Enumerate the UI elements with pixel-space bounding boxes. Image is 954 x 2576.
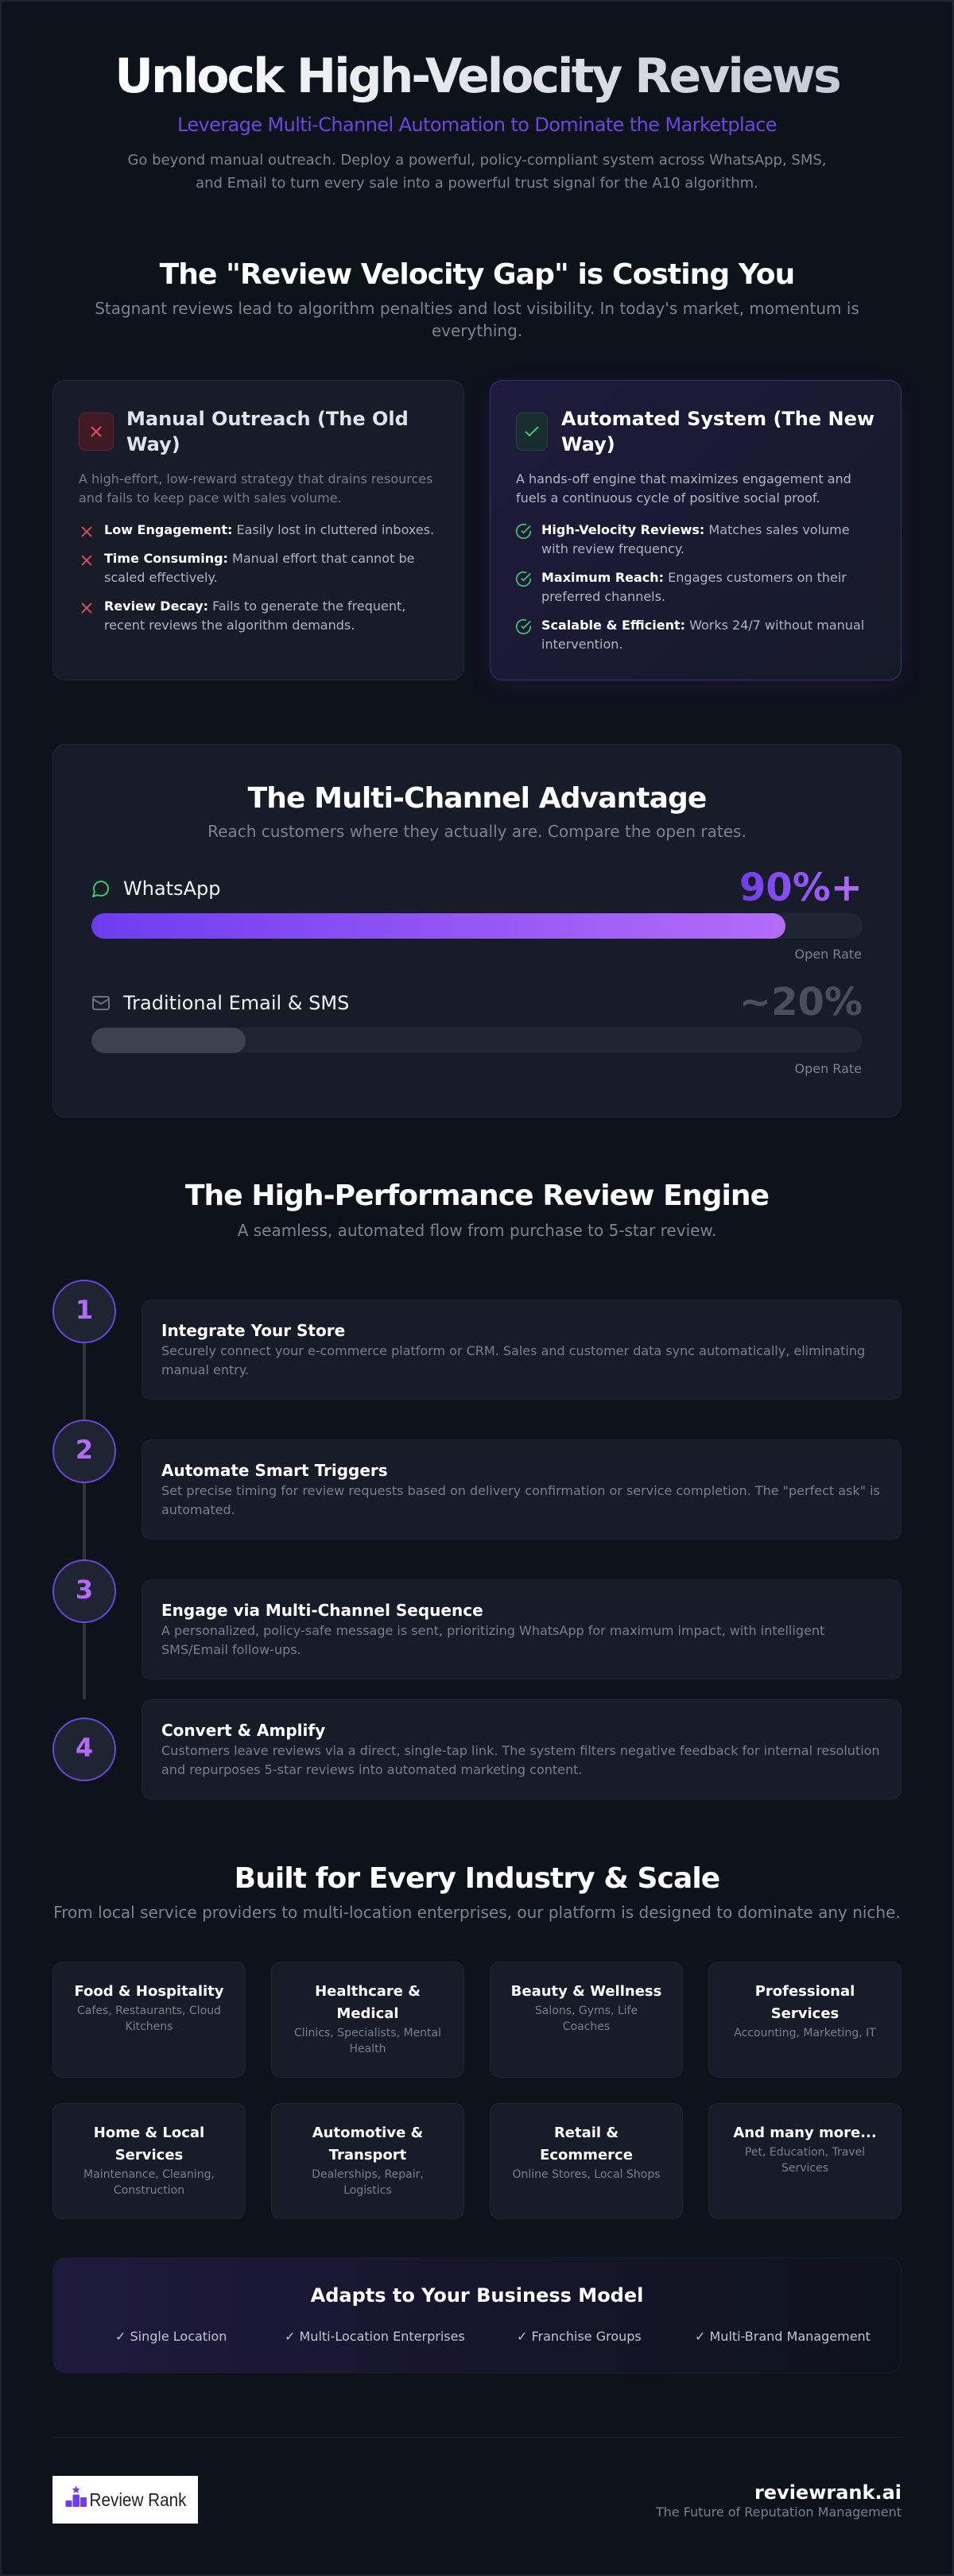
step 3 text: A personalized, policy-safe message is sent, prioritizing WhatsApp for maximum impact, with intelligent <box>161 1623 824 1638</box>
industry card: food and hospitality: Kitchens <box>126 2020 173 2033</box>
list item: review decay: recent reviews the algorithm demands. <box>104 618 355 633</box>
list item: maximum reach: preferred channels. <box>541 589 665 604</box>
section subtitle: review engine: A seamless, automated flow from purchase to 5-star review. <box>238 1221 716 1240</box>
list item: scalable <box>541 618 864 652</box>
industry card: professional services <box>708 1962 902 2078</box>
industry card: retail and ecommerce: Ecommerce <box>540 2147 633 2163</box>
icon: x time consuming <box>81 555 92 566</box>
card title: manual outreach: Way) <box>126 433 180 455</box>
list item: time consuming: scaled effectively. <box>104 570 218 585</box>
step 4 text <box>161 1743 880 1777</box>
step 3 card <box>142 1579 902 1679</box>
model: multi-location: ✓ Multi-Location Enterprises <box>285 2329 465 2344</box>
step 4 card <box>142 1699 902 1799</box>
label: whatsapp: WhatsApp <box>123 877 220 900</box>
heading: review engine: The High-Performance Review Engine <box>185 1180 769 1212</box>
industry card: beauty and wellness: Coaches <box>563 2020 610 2033</box>
card title: automated system: Automated System (The New <box>561 408 874 430</box>
industry card: many more: And many more... <box>733 2125 877 2141</box>
subtitle: Leverage Multi-Channel Automation to Dominate the Marketplace <box>177 114 777 136</box>
industry card: beauty and wellness <box>490 1962 683 2078</box>
panel: automated system <box>490 380 902 680</box>
panel: business model <box>52 2257 902 2373</box>
bar: whatsapp open rate <box>91 913 863 939</box>
list item: time consuming: Time Consuming: Manual effort that cannot be <box>104 551 414 566</box>
step 3 number: 3 <box>76 1575 93 1605</box>
step 2 number: 2 <box>76 1435 93 1465</box>
industry card: many more: Pet, Education, Travel <box>745 2146 865 2159</box>
model: franchise groups: ✓ Franchise Groups <box>517 2329 642 2344</box>
list item: high velocity: High-Velocity Reviews: Matches sales volume <box>541 522 850 537</box>
step 1 text: Securely connect your e-commerce platform or CRM. Sales and customer data sync automatically, eliminating <box>161 1343 865 1358</box>
step 2 text <box>161 1483 880 1517</box>
step 4 text: and repurposes 5-star reviews into automated marketing content. <box>161 1762 582 1777</box>
industry card: professional services: Accounting, Marketing, IT <box>734 2027 876 2039</box>
industry card: healthcare and medical: Medical <box>336 2005 399 2022</box>
list item: high velocity: with review frequency. <box>541 541 684 556</box>
list item: scalable: intervention. <box>541 637 622 652</box>
step 4 number: 4 <box>76 1733 93 1763</box>
section subtitle: industries: From local service providers to multi-location enterprises, our platform is designed to dominate any niche. <box>53 1903 901 1922</box>
card title: manual outreach: Manual Outreach (The Old <box>126 408 409 430</box>
industry card: many more <box>708 2103 902 2219</box>
list item: maximum reach: Maximum Reach: Engages customers on their <box>541 570 847 585</box>
list item: review decay <box>104 598 405 633</box>
card title: automated system: Way) <box>561 433 615 455</box>
panel: manual outreach <box>52 380 464 680</box>
list item: review decay: Review Decay: Fails to generate the frequent, <box>104 598 405 614</box>
industry card: beauty and wellness: Beauty & Wellness <box>511 1983 661 2000</box>
panel: multi-channel advantage <box>52 744 902 1118</box>
industry card: healthcare and medical: Clinics, Specialists, Mental <box>294 2027 441 2039</box>
step 4 number <box>52 1718 116 1781</box>
icon: red x box <box>79 413 114 451</box>
step 2 title: Automate Smart Triggers <box>161 1461 388 1480</box>
card title: manual outreach <box>126 408 409 455</box>
logo bars and star <box>65 2486 87 2507</box>
caption: whatsapp open rate: Open Rate <box>794 947 862 962</box>
card description: automated system: A hands-off engine that maximizes engagement and <box>516 471 851 486</box>
industry card: beauty and wellness: Salons, Gyms, Life <box>535 2005 638 2017</box>
step 2 card <box>142 1439 902 1540</box>
industry card: professional services: Services <box>771 2005 839 2022</box>
card title: automated system <box>561 408 874 455</box>
caption: email and sms open rate: Open Rate <box>794 1061 862 1076</box>
industry card: retail and ecommerce: Online Stores, Local Shops <box>512 2168 661 2181</box>
industry card: automotive and transport: Dealerships, Repair, <box>312 2168 424 2181</box>
industry card: healthcare and medical: Healthcare & <box>315 1983 421 2000</box>
step 2 number <box>52 1420 116 1483</box>
heading: multi-channel advantage: The Multi-Channel Advantage <box>248 782 706 815</box>
footer brand: reviewrank.ai <box>754 2481 902 2504</box>
icon: x review decay <box>81 602 92 614</box>
model: single location: ✓ Single Location <box>115 2329 227 2344</box>
intro text: and Email to turn every sale into a powerful trust signal for the A10 algorithm. <box>196 175 758 191</box>
list item: scalable: Scalable & Efficient: Works 24/7 without manual <box>541 618 864 633</box>
icon: check maximum reach <box>515 571 531 587</box>
step 4 title: Convert & Amplify <box>161 1721 325 1740</box>
industry card: home and local services: Home & Local <box>94 2125 204 2141</box>
icon: whatsapp chat bubble <box>92 881 109 897</box>
model: multi-brand: ✓ Multi-Brand Management <box>695 2329 871 2344</box>
logo: review rank <box>52 2476 198 2524</box>
industry card: automotive and transport <box>271 2103 464 2219</box>
industry card: home and local services: Construction <box>114 2184 184 2197</box>
list item: time consuming <box>104 551 414 585</box>
industry card: food and hospitality: Cafes, Restaurants, Cloud <box>77 2005 221 2017</box>
card description: automated system: fuels a continuous cycle of positive social proof. <box>516 490 820 506</box>
step 4 text: Customers leave reviews via a direct, single-tap link. The system filters negative feedback for internal resolution <box>161 1743 880 1758</box>
step 3 number <box>52 1559 116 1623</box>
list item: maximum reach <box>541 570 847 604</box>
intro text <box>127 152 827 191</box>
footer tagline: The Future of Reputation Management <box>656 2504 902 2520</box>
step 1 number: 1 <box>76 1295 93 1325</box>
industry card: healthcare and medical <box>271 1962 464 2078</box>
industry card: home and local services <box>52 2103 246 2219</box>
industry card: automotive and transport: Transport <box>329 2147 406 2163</box>
industry card: automotive and transport: Automotive & <box>312 2125 423 2141</box>
industry card: food and hospitality <box>52 1962 246 2078</box>
step 3 title: Engage via Multi-Channel Sequence <box>161 1601 483 1620</box>
industry card: home and local services: Maintenance, Cleaning, <box>83 2168 215 2181</box>
list item: low engagement: Low Engagement: Easily lost in cluttered inboxes. <box>104 522 434 537</box>
section subtitle: review velocity gap: everything. <box>432 321 522 340</box>
section subtitle: multi-channel: Reach customers where they actually are. Compare the open rates. <box>207 822 747 841</box>
industry card: automotive and transport: Logistics <box>343 2184 392 2197</box>
industry card: retail and ecommerce: Retail & <box>554 2125 619 2141</box>
icon: green check box <box>516 413 548 451</box>
bar: email and sms open rate <box>91 1028 863 1053</box>
label: email and sms: Traditional Email & SMS <box>123 992 349 1014</box>
intro text: Go beyond manual outreach. Deploy a powerful, policy-compliant system across WhatsApp, SMS, <box>127 152 827 169</box>
industry card: home and local services: Services <box>115 2147 183 2163</box>
industry card: retail and ecommerce <box>490 2103 683 2219</box>
icon: x low engagement <box>81 526 92 537</box>
logo: review rank: Review Rank <box>89 2489 187 2510</box>
icon: mail envelope <box>92 996 110 1010</box>
heading: review velocity gap: The "Review Velocity Gap" is Costing You <box>160 258 794 291</box>
step 1 card <box>142 1300 902 1400</box>
icon: check high velocity <box>515 523 531 539</box>
industry card: professional services: Professional <box>755 1983 855 2000</box>
industry card: healthcare and medical: Health <box>350 2043 386 2055</box>
step 1 title: Integrate Your Store <box>161 1321 345 1340</box>
card description: manual outreach <box>79 471 432 506</box>
section subtitle: review velocity gap: Stagnant reviews lead to algorithm penalties and lost visibility. In today's market, momentum is <box>95 299 859 318</box>
card description: automated system <box>516 471 851 506</box>
step 3 text: SMS/Email follow-ups. <box>161 1642 301 1657</box>
step 1 text <box>161 1343 865 1377</box>
list item: high velocity <box>541 522 850 556</box>
heading: industries: Built for Every Industry & Scale <box>235 1862 719 1895</box>
value: ~20%: ~20% <box>739 980 863 1025</box>
heading: business model: Adapts to Your Business Model <box>311 2284 643 2307</box>
section subtitle: review velocity gap <box>95 299 859 340</box>
industry card: many more: Services <box>781 2162 828 2175</box>
step 3 text <box>161 1623 824 1657</box>
title: Unlock High-Velocity Reviews <box>114 48 840 104</box>
card description: manual outreach: and fails to keep pace with sales volume. <box>79 490 342 506</box>
step 2 text: automated. <box>161 1502 235 1517</box>
industry card: food and hospitality: Food & Hospitality <box>74 1983 224 2000</box>
icon: check scalable <box>515 618 531 634</box>
step 2 text: Set precise timing for review requests based on delivery confirmation or service completion. The "perfect ask" is <box>161 1483 880 1498</box>
step 1 number <box>52 1280 116 1343</box>
step 1 text: manual entry. <box>161 1362 249 1377</box>
card description: manual outreach: A high-effort, low-reward strategy that drains resources <box>79 471 432 486</box>
value: 90%+: 90%+ <box>739 866 863 910</box>
